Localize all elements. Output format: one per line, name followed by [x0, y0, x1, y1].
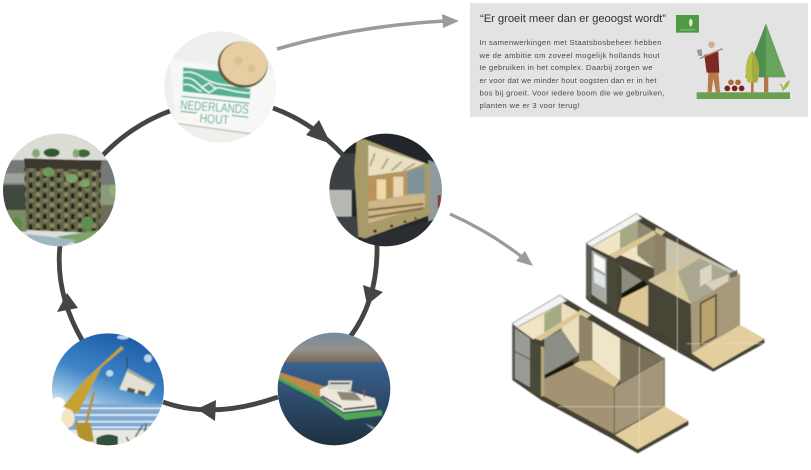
arrowhead: right to ship: [363, 285, 383, 305]
arrowhead: crane to building: [57, 293, 78, 312]
hanging module: [119, 357, 155, 396]
icon: lumberjack and trees: [697, 23, 790, 99]
text block: [478, 38, 664, 110]
panel: Er groeit meer dan er geoogst wordt: [470, 3, 808, 117]
logo wordmark: [180, 100, 249, 125]
text block: er voor dat we minder hout oogsten dan er in het: [480, 76, 657, 85]
drawing: rear timber module: [586, 213, 764, 372]
arrow: to module drawings: [450, 214, 533, 266]
photo: crane lifting module: [52, 333, 164, 446]
wood slice: [217, 41, 268, 89]
logo mark: [183, 67, 251, 99]
text block: we de ambitie om zoveel mogelijk hollands hout: [478, 51, 660, 60]
photo: timber module in factory: [329, 134, 442, 246]
logo wordmark: NEDERLANDS: [180, 98, 249, 117]
text block: In samenwerkingen met Staatsbosbeheer hebben: [480, 38, 662, 47]
text block: planten we er 3 voor terug!: [480, 101, 580, 110]
icon: green logo: [676, 15, 699, 33]
logo wordmark: HOUT: [199, 111, 230, 127]
heading: “Er groeit meer dan er geoogst wordt”: [480, 13, 666, 25]
photo: green timber building: [3, 134, 116, 246]
arrowhead: ship to crane: [197, 400, 216, 421]
text block: te gebruiken in het complex. Daarbij zorgen we: [480, 63, 652, 72]
cycle ring arcs: [59, 108, 377, 410]
photo: cargo ship on river: [278, 332, 390, 446]
arrowhead: top to right: [306, 120, 331, 144]
photo: Nederlands Hout logo with wood slice: [164, 32, 276, 142]
drawing: front timber module: [512, 295, 688, 453]
arrow: to text panel: [277, 14, 459, 49]
text block: bos bij groeit. Voor iedere boom die we gebruiken,: [480, 88, 664, 98]
